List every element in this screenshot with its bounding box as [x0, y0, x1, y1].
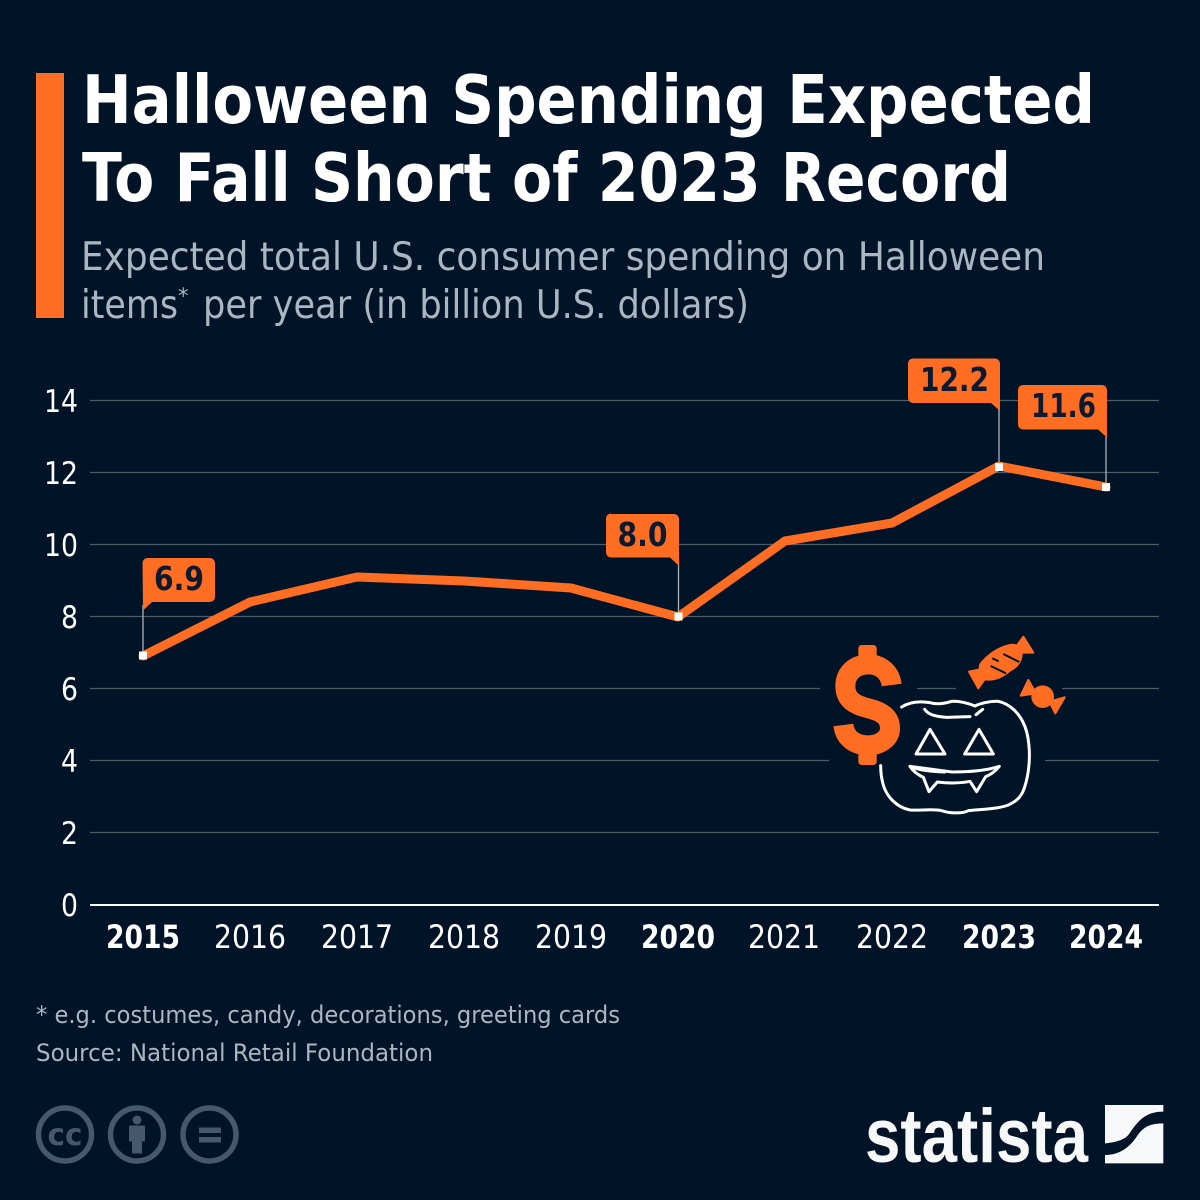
y axis labels: 12: [44, 456, 78, 492]
x axis labels: 2017: [321, 918, 393, 956]
callout: 11.6: [1018, 385, 1107, 438]
y axis labels: [44, 384, 78, 924]
title: To Fall Short of 2023 Record: [82, 139, 1011, 217]
icon: no derivatives: [183, 1108, 236, 1161]
callout: 8.0: [606, 513, 679, 566]
callout: 6.9: [142, 558, 215, 610]
x axis labels: 2023: [962, 918, 1036, 956]
y axis labels: 14: [44, 384, 78, 420]
icon: round candy: [1021, 680, 1065, 713]
callout: 11.6: 11.6: [1031, 386, 1096, 425]
subtitle: Expected total U.S. consumer spending on Halloween: [81, 235, 1045, 280]
icon: wrapped candy: [969, 637, 1033, 688]
icon: pumpkin: [881, 701, 1029, 813]
source: Source: National Retail Foundation: [36, 1039, 433, 1067]
leader lines: [143, 405, 1106, 655]
icon: cc: [38, 1108, 92, 1161]
x axis labels: 2022: [856, 918, 928, 956]
x axis labels: 2020: [641, 918, 715, 956]
callout: 8.0: 8.0: [618, 515, 668, 554]
x axis labels: 2018: [428, 918, 500, 956]
y axis labels: 8: [61, 600, 78, 636]
x axis labels: [106, 918, 1143, 956]
y axis labels: 2: [61, 816, 78, 852]
callout: 6.9: 6.9: [154, 559, 204, 598]
x axis labels: 2016: [214, 918, 286, 956]
title: [82, 61, 1095, 217]
line series: [143, 466, 1106, 656]
subtitle: [81, 235, 1045, 328]
statista logo mark: [1105, 1105, 1163, 1163]
x axis labels: 2021: [748, 918, 820, 956]
icon: attribution: [110, 1108, 164, 1161]
y axis labels: 6: [61, 672, 78, 708]
data point markers: [139, 463, 1110, 660]
icon: cc: cc: [48, 1118, 82, 1153]
icon: dollar sign: [843, 645, 892, 765]
subtitle: items: [81, 283, 178, 328]
x axis labels: 2019: [535, 918, 607, 956]
y axis labels: 4: [61, 744, 78, 780]
grid lines: [90, 400, 1159, 832]
title: Halloween Spending Expected: [82, 61, 1095, 139]
x axis labels: 2015: [106, 918, 180, 956]
subtitle: *: [178, 284, 188, 308]
footnote: * e.g. costumes, candy, decorations, greeting cards: [36, 1001, 620, 1029]
callout: 12.2: [908, 358, 1000, 411]
callout: 12.2: 12.2: [920, 360, 989, 399]
statista wordmark: statista: [865, 1094, 1089, 1179]
y axis labels: 10: [44, 528, 78, 564]
subtitle: per year (in billion U.S. dollars): [203, 283, 749, 328]
y axis labels: 0: [61, 888, 78, 924]
x axis labels: 2024: [1069, 918, 1143, 956]
x axis line: [90, 904, 1159, 906]
accent bar: [36, 73, 64, 318]
